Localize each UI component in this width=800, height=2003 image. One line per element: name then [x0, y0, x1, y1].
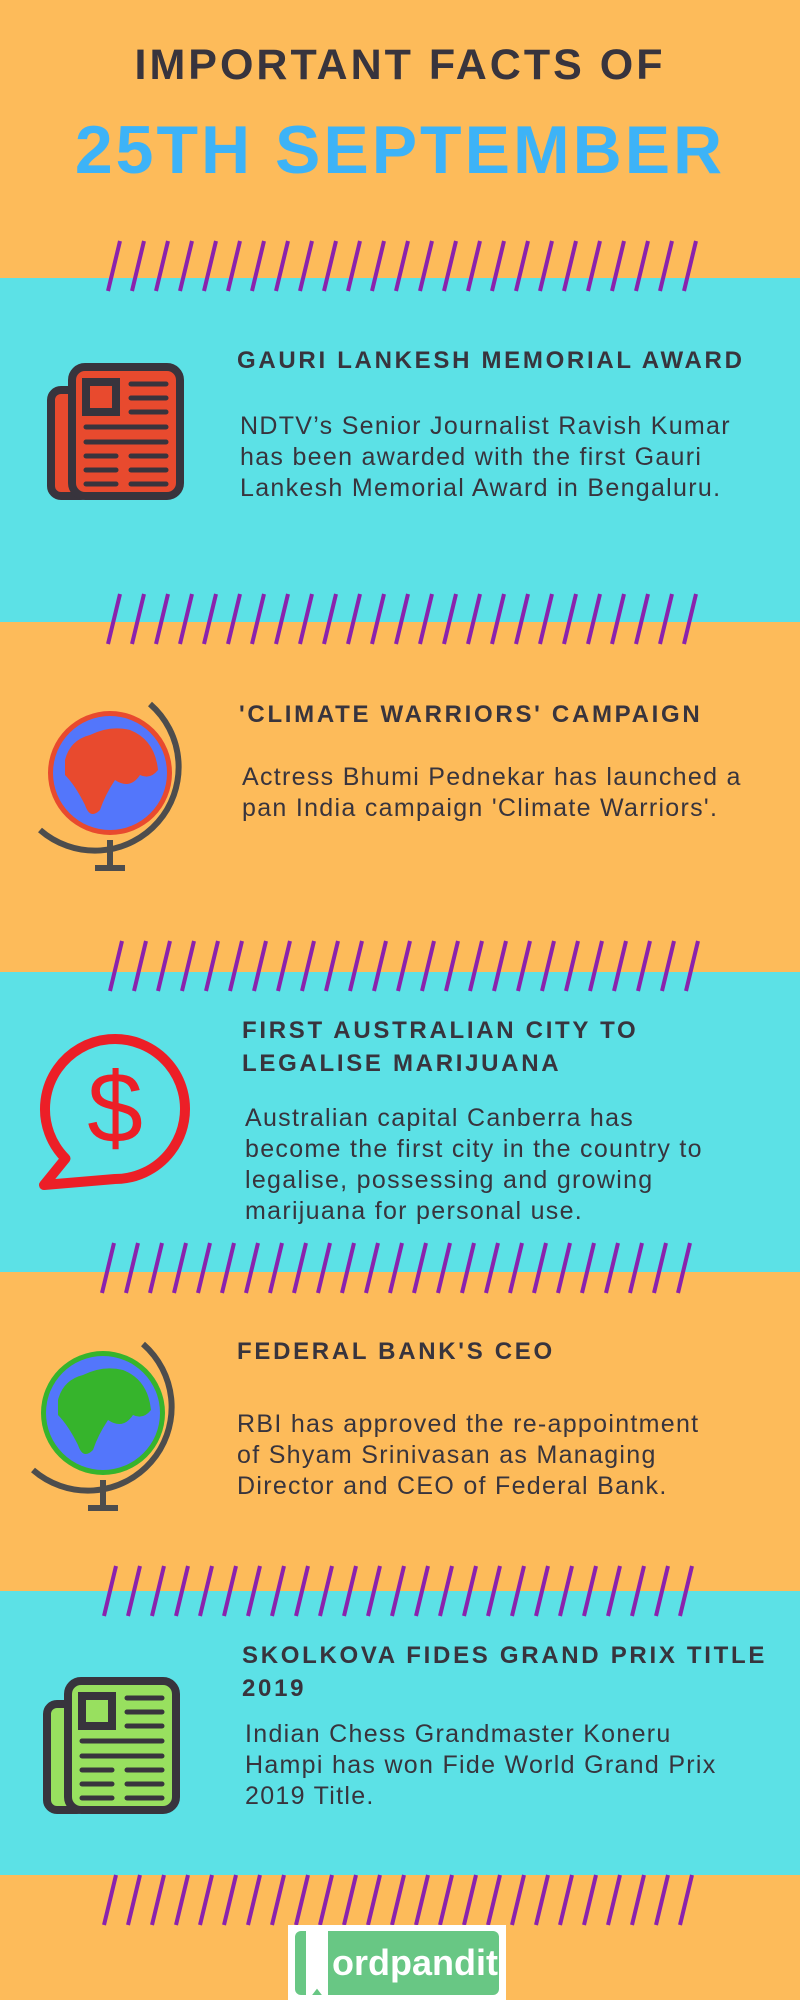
text: NDTV’s Senior Journalist Ravish Kumar	[240, 412, 731, 440]
text: pan India campaign 'Climate Warriors'.	[242, 794, 718, 822]
panel: Federal Bank CEO	[31, 1338, 699, 1511]
text: legalise, possessing and growing	[245, 1166, 654, 1194]
heading	[242, 1017, 638, 1077]
subtitle date: 25TH SEPTEMBER	[75, 112, 725, 188]
icon: globe red	[38, 702, 182, 871]
text	[242, 763, 742, 822]
text: become the first city in the country to	[245, 1135, 703, 1163]
heading: FEDERAL BANK'S CEO	[237, 1338, 555, 1365]
text: 2019 Title.	[245, 1782, 375, 1810]
heading	[242, 1642, 767, 1702]
heading: GAURI LANKESH MEMORIAL AWARD	[237, 347, 745, 374]
text	[245, 1104, 703, 1225]
text: of Shyam Srinivasan as Managing	[237, 1441, 657, 1469]
text: has been awarded with the first Gauri	[240, 443, 702, 471]
text	[237, 1410, 699, 1500]
text: Actress Bhumi Pednekar has launched a	[242, 763, 742, 791]
heading: LEGALISE MARIJUANA	[242, 1050, 561, 1077]
text: Indian Chess Grandmaster Koneru	[245, 1720, 672, 1748]
text: Director and CEO of Federal Bank.	[237, 1472, 668, 1500]
panel: Climate Warriors	[38, 701, 742, 871]
icon: dollar speech bubble: $	[87, 1052, 143, 1164]
text: RBI has approved the re-appointment	[237, 1410, 699, 1438]
logo: wordpandit	[288, 1925, 506, 2000]
text	[245, 1720, 717, 1810]
icon: newspaper green	[43, 1677, 180, 1814]
icon: newspaper red	[47, 363, 184, 500]
heading: 'CLIMATE WARRIORS' CAMPAIGN	[239, 701, 702, 728]
panel: Koneru Hampi	[43, 1642, 767, 1814]
icon: dollar speech bubble	[39, 1034, 190, 1190]
heading: SKOLKOVA FIDES GRAND PRIX TITLE	[242, 1642, 767, 1669]
icon: globe green	[31, 1342, 175, 1511]
heading: 2019	[242, 1675, 306, 1702]
text: Australian capital Canberra has	[245, 1104, 634, 1132]
title: IMPORTANT FACTS OF	[135, 41, 665, 89]
heading: FIRST AUSTRALIAN CITY TO	[242, 1017, 638, 1044]
text: marijuana for personal use.	[245, 1197, 583, 1225]
text: Hampi has won Fide World Grand Prix	[245, 1751, 717, 1779]
text	[240, 412, 731, 502]
panel: Gauri Lankesh award	[47, 347, 745, 502]
panel: Canberra marijuana	[39, 1017, 703, 1225]
text: Lankesh Memorial Award in Bengaluru.	[240, 474, 721, 502]
logo: wordpandit: ordpandit	[332, 1942, 498, 1983]
